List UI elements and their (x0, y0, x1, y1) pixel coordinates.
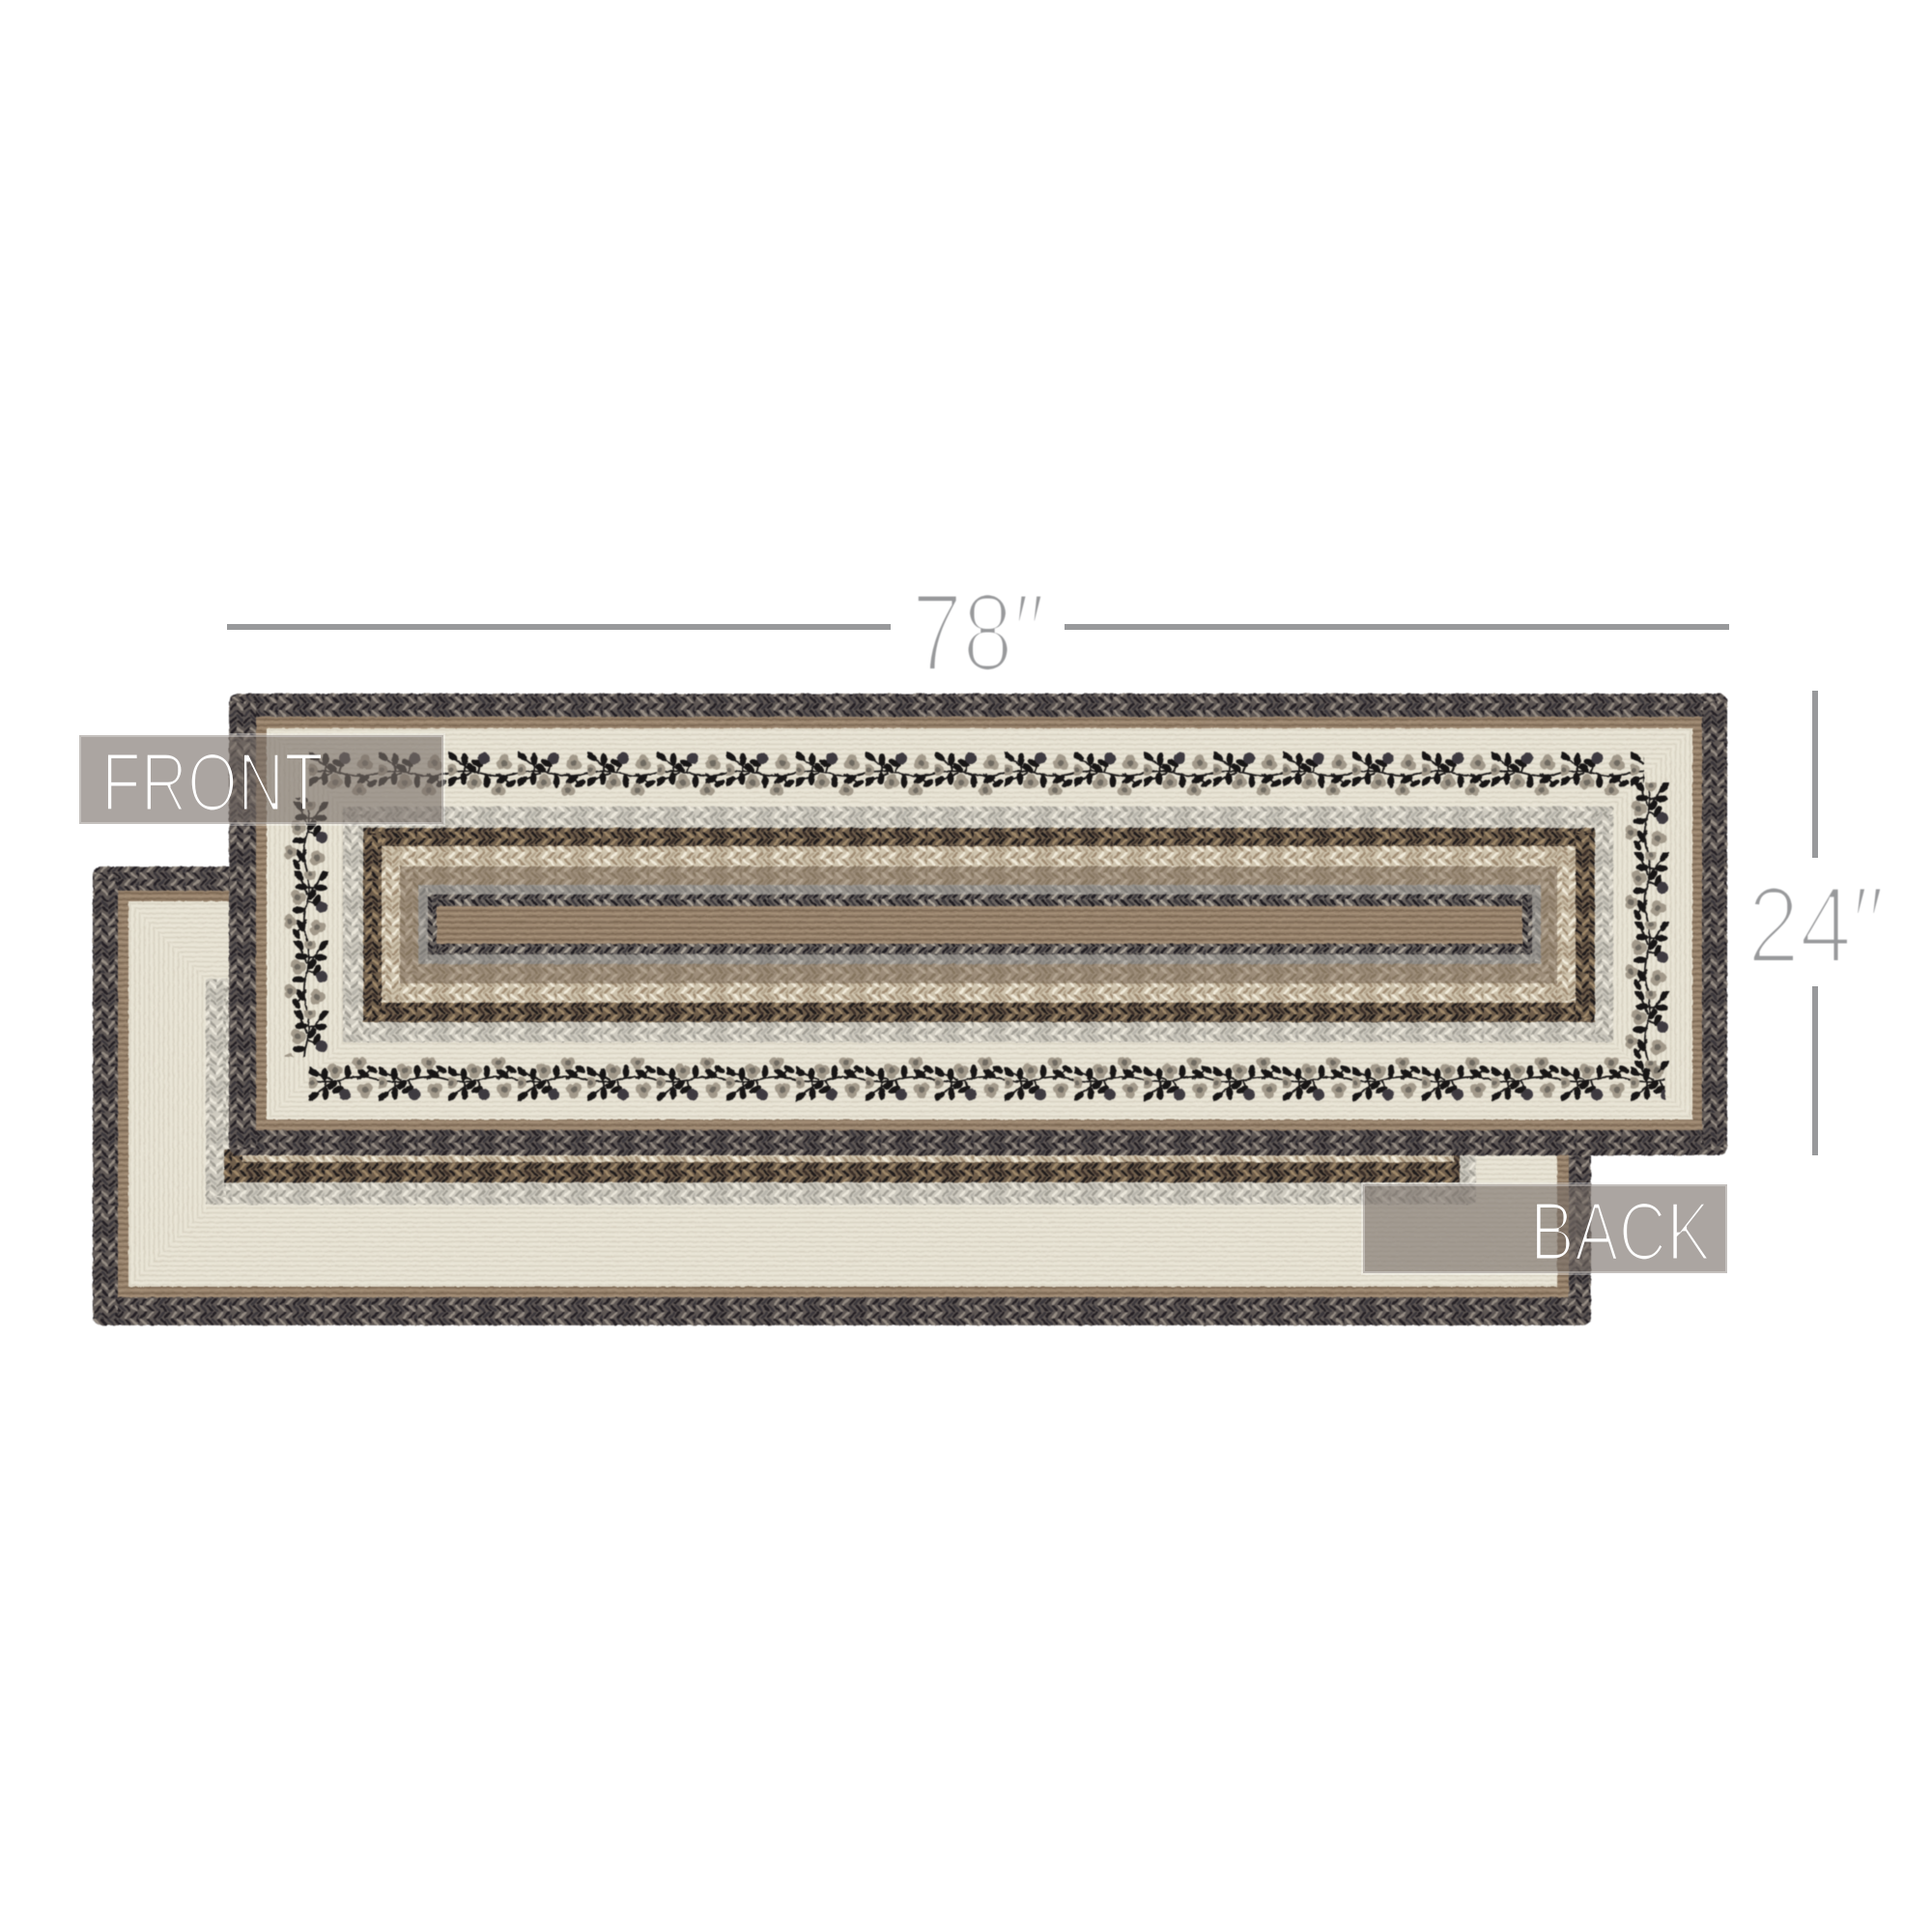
front rug: outer dark braid border (229, 694, 1727, 1155)
floral vine: top (309, 746, 1644, 800)
label: back (1363, 1184, 1727, 1278)
front label text: FRONT (101, 737, 324, 829)
front label panel (79, 735, 443, 824)
front rug: tan band (256, 717, 1702, 1130)
front rug (229, 694, 1727, 1155)
front rug: grey braid band (343, 807, 1613, 1042)
width dimension line: right segment (1065, 624, 1729, 630)
back rug: cream field (128, 901, 1557, 1287)
back rug: tan band (118, 891, 1569, 1297)
front rug: inner dark braid (428, 895, 1532, 954)
front rug: centre tan panel (437, 906, 1522, 944)
back rug: outer dark braid border (93, 867, 1591, 1325)
back rug: dark brown braid band (224, 1150, 1460, 1182)
width label 78 inches: 78″ (912, 572, 1045, 695)
front rug: taupe braid band (400, 867, 1557, 983)
width dimension line: left segment (227, 624, 891, 630)
height dimension line: bottom segment (1812, 986, 1818, 1155)
floral vine: bottom (309, 1053, 1665, 1107)
front rug: cream field (267, 728, 1692, 1120)
floral vine: right (1621, 782, 1675, 1072)
back label text: BACK (1530, 1186, 1711, 1278)
back label panel (1363, 1184, 1727, 1273)
label: front (79, 735, 443, 829)
floral vine: left (280, 798, 334, 1057)
back rug: grey braid band (206, 979, 1476, 1205)
height dimension line: top segment (1812, 691, 1818, 858)
front rug: dark brown braid band (363, 828, 1595, 1022)
back rug: light braid sliver (242, 1150, 1454, 1162)
front rug: light braid band (382, 846, 1576, 1003)
height label 24 inches: 24″ (1747, 865, 1885, 985)
front rug: grey band (418, 885, 1541, 964)
back rug (93, 867, 1591, 1325)
